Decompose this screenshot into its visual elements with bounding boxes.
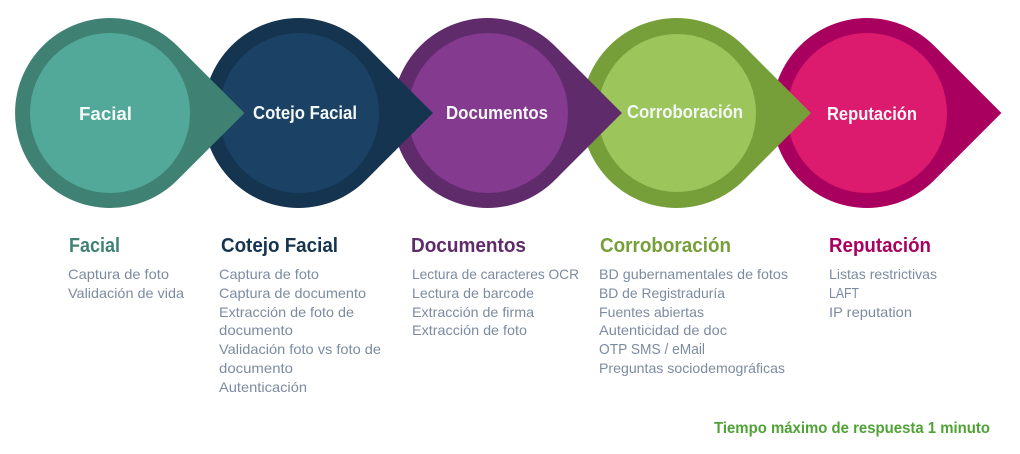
- list: Documentos: [412, 266, 579, 338]
- list: Corroboración: OTP SMS / eMail: [599, 341, 705, 358]
- list: Corroboración: [599, 266, 788, 376]
- step shape: Corroboración: Corroboración: [627, 102, 743, 122]
- list: Documentos: Lectura de barcode: [412, 285, 534, 301]
- list: Corroboración: BD gubernamentales de fotos: [599, 266, 788, 282]
- list: Cotejo Facial: Autenticación: [219, 379, 307, 395]
- list: Corroboración: Autenticidad de doc: [599, 322, 727, 338]
- step shape: Documentos: [393, 18, 622, 208]
- list: Cotejo Facial: Validación foto vs foto de: [219, 341, 381, 357]
- step shape: Documentos: Documentos: [446, 103, 548, 123]
- step shape: Facial: Facial: [79, 104, 132, 124]
- step shape: Reputación: [772, 18, 1001, 208]
- list: Reputación: IP reputation: [829, 304, 912, 320]
- list: Reputación: LAFT: [829, 285, 859, 302]
- footer note: response time: Tiempo máximo de respuesta 1 minuto: [714, 420, 990, 437]
- list: Reputación: Listas restrictivas: [829, 266, 937, 282]
- list: Corroboración: Fuentes abiertas: [599, 304, 704, 320]
- list: Cotejo Facial: documento: [219, 322, 293, 338]
- list: Cotejo Facial: Extracción de foto de: [219, 304, 354, 320]
- heading: Reputación: Reputación: [829, 234, 931, 257]
- list: Facial: [68, 266, 184, 301]
- list: Reputación: [829, 266, 937, 320]
- column: Documentos: [411, 234, 579, 338]
- list: Documentos: Extracción de foto: [412, 322, 527, 338]
- step shape: Facial: [15, 18, 244, 208]
- column: Reputación: [829, 234, 937, 320]
- column: Cotejo Facial: [219, 234, 381, 395]
- list: Cotejo Facial: Captura de documento: [219, 285, 366, 301]
- list: Corroboración: Preguntas sociodemográficas: [599, 360, 785, 376]
- column: Corroboración: [599, 234, 788, 376]
- column: Facial: [68, 234, 184, 301]
- list: Documentos: Lectura de caracteres OCR: [412, 266, 579, 282]
- list: Cotejo Facial: documento: [219, 360, 293, 376]
- list: Cotejo Facial: Captura de foto: [219, 266, 319, 282]
- list: Cotejo Facial: [219, 266, 381, 395]
- heading: Documentos: Documentos: [411, 234, 526, 257]
- step shape: Corroboración: [582, 18, 811, 208]
- heading: Facial: Facial: [69, 234, 120, 257]
- list: Documentos: Extracción de firma: [412, 304, 534, 320]
- step shape: Cotejo Facial: [204, 18, 433, 208]
- step shape: Cotejo Facial: Cotejo Facial: [253, 103, 357, 123]
- list: Corroboración: BD de Registraduría: [599, 285, 725, 301]
- list: Facial: Validación de vida: [68, 285, 184, 301]
- list: Facial: Captura de foto: [68, 266, 169, 282]
- step shape: Reputación: Reputación: [827, 104, 917, 124]
- heading: Corroboración: Corroboración: [600, 234, 731, 257]
- heading: Cotejo Facial: Cotejo Facial: [221, 234, 338, 257]
